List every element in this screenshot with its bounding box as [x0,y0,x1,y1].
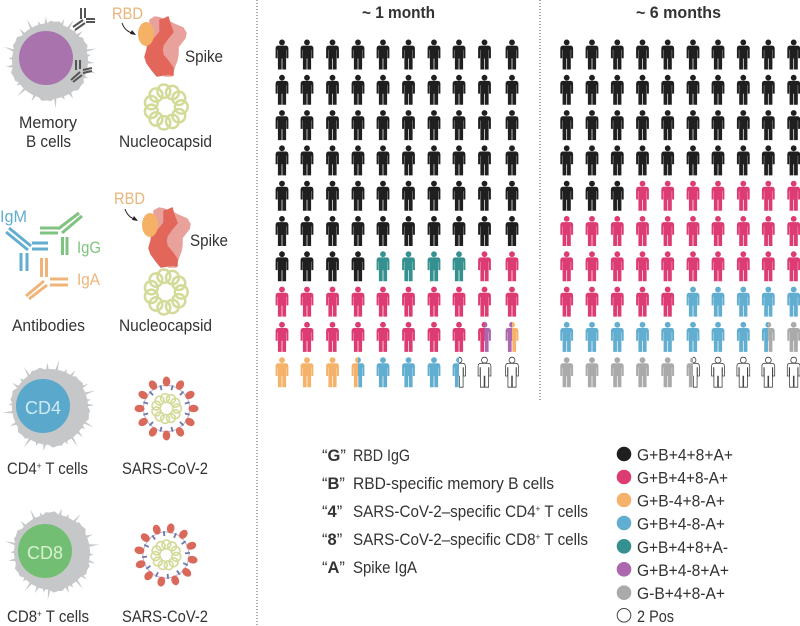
legend: response profiles: G+B+4+8-A+ [637,470,728,488]
legend: response profiles: G+B-4+8-A+ [637,492,725,510]
icon: spike protein with RBD, second [125,208,190,267]
icon: SARS-CoV-2 virus, second [129,518,203,592]
heading: ~ 1 month: ~ 1 month [362,4,435,22]
icon: memory B cell [4,8,97,109]
icon: nucleocapsid [145,85,188,129]
text block: letter key: “A” [322,559,345,577]
icon: SARS-CoV-2 virus [134,376,198,440]
legend: response profiles: G+B+4+8+A- [637,539,728,557]
label: Spike: Spike [185,48,223,66]
pictogram chart: ~ 1 month [276,40,518,387]
text block: letter key: Spike IgA [353,559,417,577]
label: CD4+ T cells: T cells [41,460,88,478]
label: Spike, second: Spike [190,232,228,250]
legend: response profiles [617,446,733,626]
legend: response profiles: G-B+4+8-A+ [637,585,725,603]
label: Nucleocapsid: Nucleocapsid [119,133,212,151]
heading: ~ 6 months: ~ 6 months [636,4,721,22]
label: RBD: RBD [112,5,143,23]
legend: response profiles: G+B+4-8-A+ [637,516,725,534]
label: CD4+ T cells: CD4 [7,460,40,478]
panel: immune components and antigens [0,5,228,626]
label: RBD, second: RBD [114,190,145,208]
label: SARS-CoV-2: SARS-CoV-2 [122,460,208,478]
icon: nucleocapsid, second [145,270,188,314]
icon: CD4 T cell: CD4 [25,398,61,418]
icon: IgA antibody [26,258,68,299]
label: IgM: IgM [0,208,27,226]
text block: letter key: SARS-CoV-2–specific CD8 [353,531,551,549]
text block: letter key: RBD IgG [353,447,410,465]
label: Nucleocapsid, second: Nucleocapsid [119,317,212,335]
label: CD8+ T cells: + [37,609,42,619]
legend: response profiles: G+B+4-8+A+ [637,562,729,580]
icon: spike protein with RBD [122,17,186,76]
label: Memory B cells [19,114,78,151]
icon: CD8 T cell [0,492,110,611]
label: CD4+ T cells: + [37,461,41,471]
legend: response profiles: 2 Pos [637,608,674,626]
label: Memory B cells: Memory [19,114,78,132]
text block: letter key: T cells [540,503,588,521]
text block: letter key: SARS-CoV-2–specific CD4 [353,503,551,521]
text block: letter key [322,447,588,577]
pictogram chart: ~ 6 months [560,40,800,387]
label: IgG: IgG [77,239,101,257]
text block: letter key: “8” [322,531,342,549]
icon: IgM antibody [6,228,48,271]
label: Antibodies: Antibodies [12,317,85,335]
label: Memory B cells: B cells [26,133,71,151]
label: IgA: IgA [77,271,100,289]
icon: CD4 T cell [0,343,114,474]
legend: response profiles: G+B+4+8+A+ [637,446,733,464]
text block: letter key: T cells [540,531,588,549]
icon: IgG antibody [40,213,82,255]
label: CD8+ T cells: T cells [42,608,89,626]
text block: letter key: + [536,504,540,514]
text block: letter key: “G” [322,447,346,465]
icon: CD8 T cell: CD8 [27,543,63,563]
label: CD8+ T cells: CD8 [7,608,40,626]
text block: letter key: “4” [322,503,342,521]
text block: letter key: RBD-specific memory B cells [353,475,554,493]
text block: letter key: + [536,532,540,542]
label: SARS-CoV-2, second: SARS-CoV-2 [122,608,208,626]
text block: letter key: “B” [322,475,345,493]
